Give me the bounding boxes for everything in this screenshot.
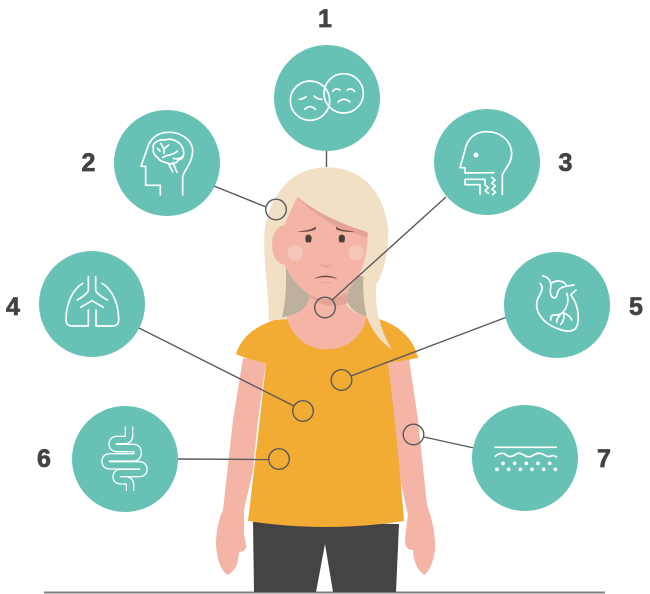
number 7: 7: [597, 445, 611, 473]
face: [282, 197, 368, 299]
t-shirt: [236, 316, 418, 527]
ground line: [44, 592, 605, 594]
number 3: 3: [559, 149, 572, 177]
circle 1: mood: [274, 45, 380, 151]
eyes: [305, 235, 312, 242]
number 2: 2: [82, 149, 95, 177]
circle 6: intestine: [72, 406, 178, 512]
circle 3: throat: [434, 109, 540, 215]
icon: intestine: [106, 427, 143, 491]
hair shadow behind neck: [282, 265, 367, 317]
circle 7: skin: [472, 405, 578, 511]
eyebrows: [298, 227, 316, 232]
icon: anatomical heart: [537, 276, 578, 331]
nose: [319, 264, 333, 267]
ear: [272, 225, 296, 265]
right arm: [388, 358, 435, 575]
neck and chest: [287, 290, 367, 349]
marker rings: [266, 199, 424, 469]
icon: two sad faces: [290, 74, 363, 120]
front hair strand: [363, 230, 392, 349]
icon: head with brain: [141, 132, 193, 195]
icon: head profile with airway: [460, 132, 512, 195]
number 5: 5: [629, 293, 643, 321]
left arm: [216, 358, 266, 575]
icon: skin layers: [494, 447, 557, 471]
circle 5: heart: [504, 252, 610, 358]
figure: woman: [216, 167, 435, 592]
trousers: [253, 522, 399, 592]
neck shadow: [310, 293, 347, 306]
head and hair: [264, 167, 392, 349]
circle 4: lungs: [39, 251, 145, 357]
number 6: 6: [37, 445, 51, 473]
number 1: 1: [318, 5, 332, 33]
circle 2: brain: [114, 110, 220, 216]
icon: lungs: [66, 277, 119, 326]
cheeks: [288, 245, 303, 261]
fringe shadow: [297, 197, 368, 237]
connector lines: [139, 150, 507, 460]
hair back: [264, 167, 388, 321]
mouth: [315, 276, 337, 278]
number 4: 4: [6, 293, 20, 321]
